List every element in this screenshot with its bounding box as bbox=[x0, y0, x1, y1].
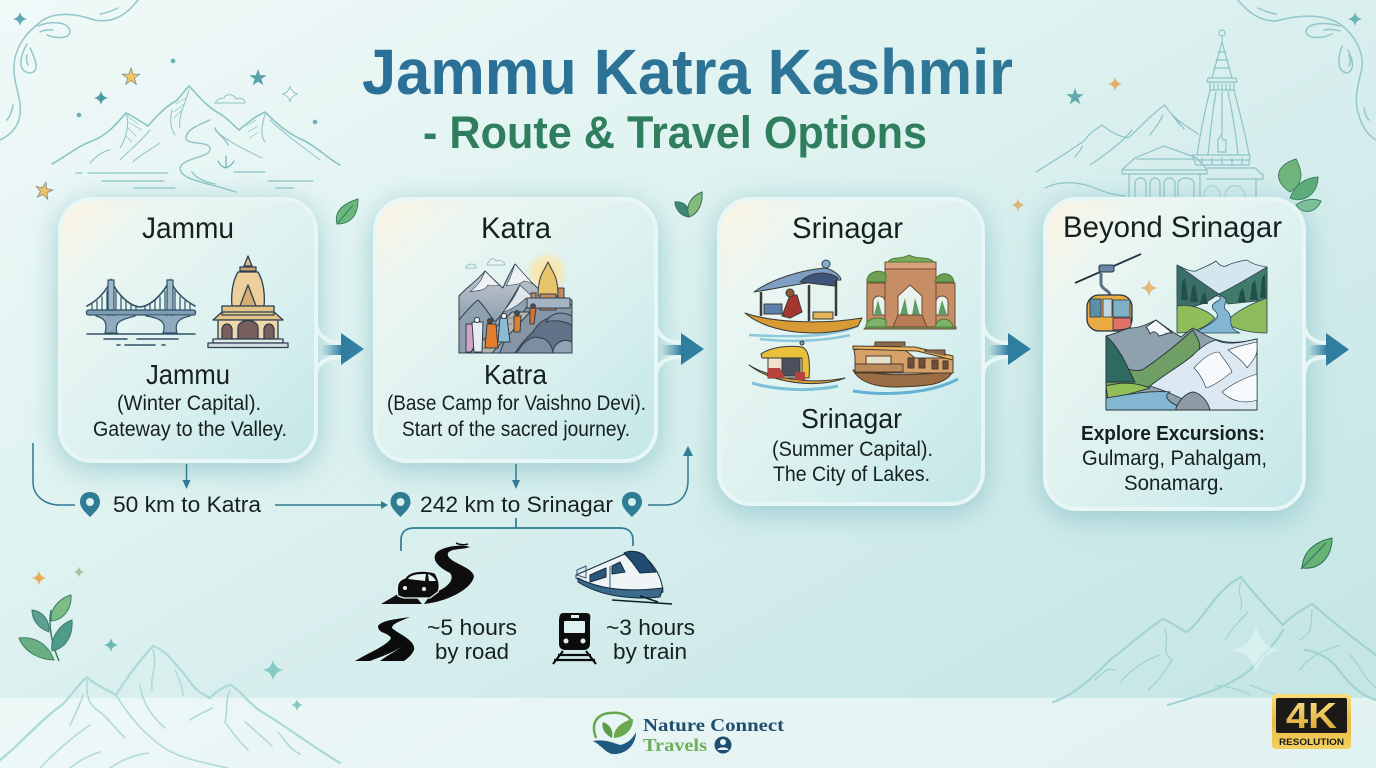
arrow: distance line to Katra bbox=[275, 501, 388, 509]
text block: Jammu bbox=[93, 359, 287, 441]
arrow: route up to Srinagar bbox=[648, 446, 693, 505]
icon: car on winding road bbox=[381, 543, 474, 604]
icon: pilgrims climbing to Vaishno Devi bbox=[459, 251, 572, 353]
icon: high-speed train bbox=[576, 551, 672, 604]
text block: Katra: (Base Camp for Vaishno Devi). bbox=[387, 392, 646, 415]
icon: map pin Jammu bbox=[80, 492, 100, 517]
label: 242 km to Srinagar: 242 km to Srinagar bbox=[420, 492, 614, 517]
bottom-left mountains line art bbox=[0, 646, 340, 768]
badge: 4K resolution: RESOLUTION bbox=[1279, 737, 1344, 748]
white sparkle bbox=[1232, 626, 1280, 674]
subtitle: - Route & Travel Options bbox=[423, 107, 927, 158]
bottom-left sprig of leaves bbox=[19, 595, 72, 661]
leaf bottom right bbox=[1301, 538, 1332, 569]
arrow: Jammu to Katra bbox=[316, 300, 364, 430]
logo mark bbox=[593, 713, 636, 754]
panel: Jammu bbox=[60, 199, 316, 461]
text: hours by train: ~3 hours bbox=[606, 615, 695, 640]
text: hours by train: by train bbox=[613, 639, 687, 664]
leaves near Katra card bbox=[675, 192, 702, 217]
text block: excursions: Explore Excursions: bbox=[1081, 422, 1265, 445]
arrow: Beyond Srinagar onward bbox=[1304, 300, 1349, 430]
icon: person badge bbox=[714, 736, 732, 754]
image: snowy mountains and river bbox=[1106, 320, 1257, 410]
panel: Srinagar bbox=[719, 199, 983, 504]
text block: excursions: Gulmarg, Pahalgam, bbox=[1082, 447, 1267, 470]
logo wordmark: Nature Connect bbox=[643, 715, 784, 735]
label: 50 km to Katra: 50 km to Katra bbox=[113, 492, 261, 517]
text: hours by road bbox=[427, 615, 517, 664]
text block: excursions bbox=[1081, 422, 1267, 495]
icon: gondola cable car bbox=[1075, 254, 1141, 331]
text block: Jammu: Jammu bbox=[146, 359, 230, 390]
route line: start from Jammu bbox=[33, 443, 75, 505]
text block: Jammu: (Winter Capital). bbox=[117, 392, 261, 415]
icon: map pin Srinagar bbox=[622, 492, 642, 517]
icon: train front bbox=[553, 613, 596, 664]
text: hours by road: by road bbox=[435, 639, 509, 664]
badge: 4K resolution bbox=[1272, 694, 1351, 749]
badge: 4K resolution: 4K bbox=[1286, 695, 1337, 736]
top-right stars bbox=[1012, 12, 1362, 212]
heading: Beyond Srinagar: Beyond Srinagar bbox=[1063, 211, 1282, 244]
bottom-right mountains line art bbox=[1053, 577, 1376, 705]
top-left mountains line art bbox=[52, 86, 340, 192]
text block: Jammu: Gateway to the Valley. bbox=[93, 418, 287, 441]
heading: Katra: Katra bbox=[481, 212, 551, 245]
arrow: Katra to Srinagar bbox=[656, 300, 704, 430]
icon: small road bbox=[355, 617, 414, 661]
icon: small shikara bbox=[749, 341, 845, 390]
icon: Mughal garden gateway bbox=[864, 255, 956, 329]
bottom-left stars bbox=[32, 566, 303, 711]
logo: Nature Connect Travels: Travels bbox=[643, 735, 707, 755]
arrow: Katra down to distance bbox=[512, 464, 520, 489]
text: hours by road: ~5 hours bbox=[427, 615, 517, 640]
text block: Srinagar bbox=[772, 403, 933, 486]
text block: Srinagar: Srinagar bbox=[801, 403, 902, 434]
icon: map pin Katra bbox=[390, 492, 410, 517]
arrow: Srinagar to Beyond Srinagar bbox=[983, 300, 1031, 430]
text block: Srinagar: (Summer Capital). bbox=[772, 438, 933, 461]
arrow: Jammu down to distance bbox=[182, 464, 190, 489]
text block: Srinagar: The City of Lakes. bbox=[773, 463, 930, 486]
image: green valley with river bbox=[1177, 260, 1267, 333]
text: hours by train bbox=[606, 615, 695, 664]
heading: Srinagar: Srinagar bbox=[792, 212, 903, 245]
heading: Jammu: Jammu bbox=[142, 212, 234, 245]
footer band bbox=[0, 698, 1376, 768]
top-right temple and mountains line art bbox=[1036, 30, 1263, 197]
icon: shikara boat bbox=[745, 260, 862, 341]
text block: Katra: Start of the sacred journey. bbox=[402, 418, 630, 441]
text block: Katra bbox=[387, 359, 646, 441]
title: Jammu Katra Kashmir bbox=[362, 36, 1013, 108]
panel: Beyond Srinagar bbox=[1045, 199, 1304, 509]
text block: Katra: Katra bbox=[484, 359, 547, 390]
logo: Nature Connect Travels bbox=[593, 713, 784, 755]
top-right swirl decoration bbox=[1238, 0, 1376, 140]
sparkle in panel bbox=[1142, 280, 1156, 296]
icon: Jammu temple bbox=[208, 256, 288, 348]
bracket: road and train options bbox=[401, 518, 633, 551]
panel: Katra bbox=[375, 199, 656, 461]
top-left swirl decoration bbox=[0, 0, 138, 140]
text block: excursions: Sonamarg. bbox=[1124, 472, 1224, 495]
icon: houseboat bbox=[853, 342, 958, 393]
top-left stars bbox=[13, 12, 317, 200]
icon: suspension bridge bbox=[86, 280, 196, 345]
top-right leaf cluster bbox=[1279, 159, 1321, 212]
leaf near Jammu card bbox=[336, 199, 358, 224]
